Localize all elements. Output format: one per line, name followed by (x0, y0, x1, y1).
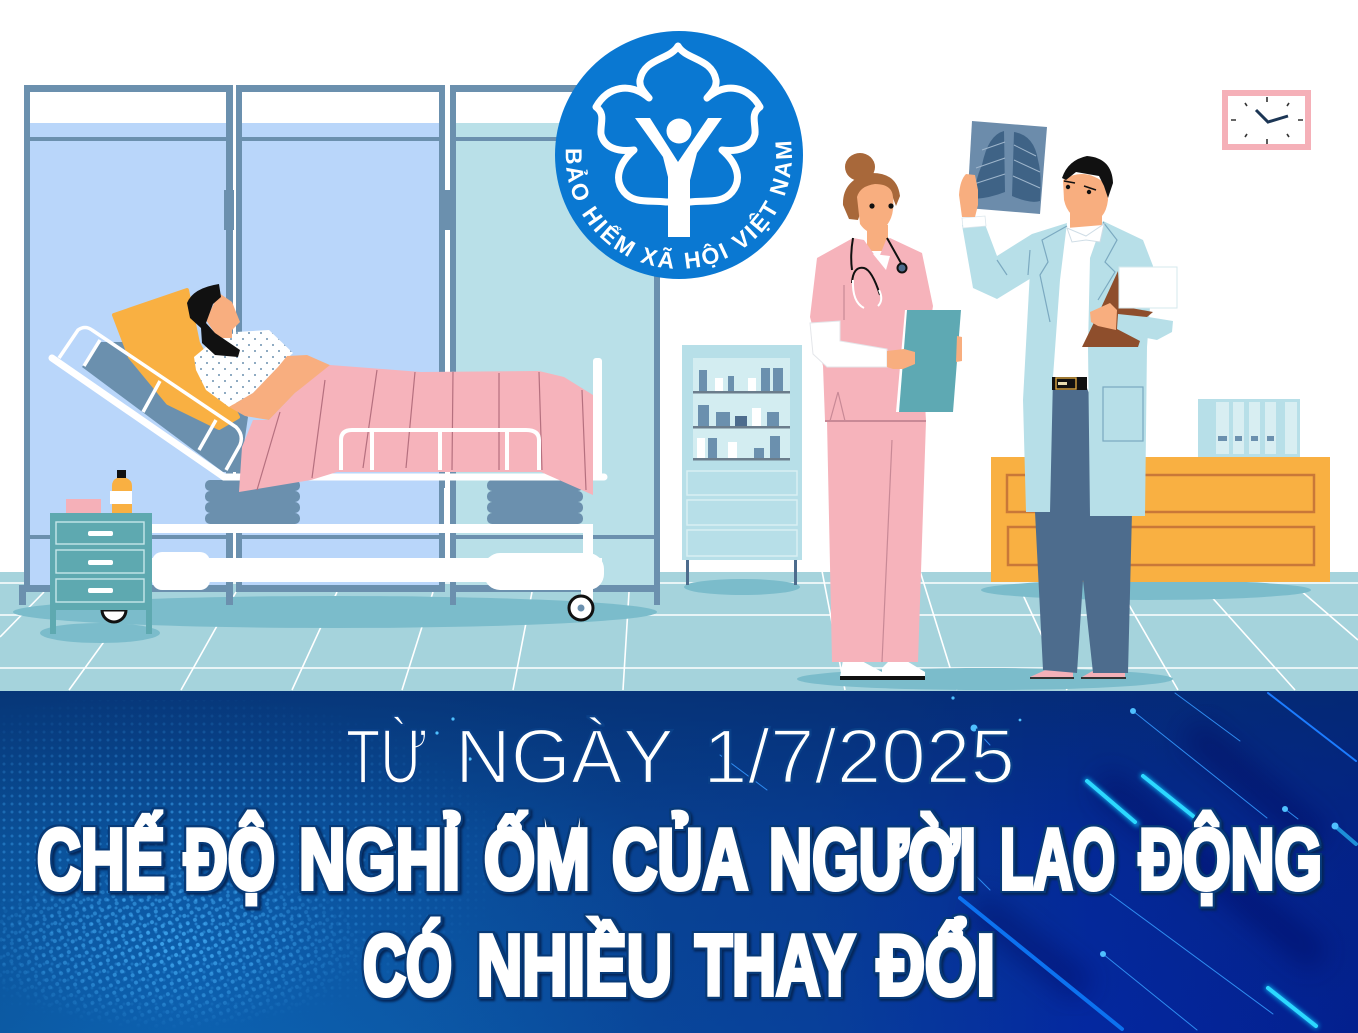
banner date line: 1/7/2025 (703, 714, 1015, 800)
bed frame (52, 358, 604, 477)
banner date line: TỪ (346, 714, 428, 800)
nurse face (857, 184, 893, 234)
doctor shirt (1053, 225, 1103, 377)
nurse hands (887, 349, 915, 369)
floor with tiles (0, 571, 1358, 692)
nurse shoes (840, 660, 925, 680)
banner headline line 1: NGƯỜI (769, 812, 976, 908)
left wheel (102, 610, 126, 622)
x-ray film (967, 121, 1047, 214)
banner headline line 1: CHẾ (37, 812, 165, 908)
bedside cabinet (50, 470, 152, 634)
pink box (66, 499, 101, 513)
doctor hand (1090, 303, 1117, 330)
banner headline line 1: ỐM (484, 812, 590, 908)
dark diagonal bands (975, 730, 1320, 990)
floor shadows (13, 579, 1311, 690)
orange desk (991, 457, 1330, 582)
doctor neck (1070, 210, 1102, 240)
nurse trousers (827, 421, 926, 662)
banner headline line 1: NGHỈ (299, 812, 460, 908)
dense dot wave (0, 868, 352, 1021)
clipboard paper (1119, 267, 1177, 308)
nurse neck (867, 225, 888, 251)
banner headline line 1 (37, 812, 1322, 908)
doctor face (1063, 174, 1108, 221)
wall background (0, 0, 1358, 575)
blanket (239, 365, 593, 495)
doctor (959, 121, 1177, 679)
doctor cuff (962, 216, 986, 228)
nurse top (810, 238, 933, 421)
logo flower (596, 46, 760, 202)
banner background (0, 691, 1358, 1033)
logo (555, 31, 803, 279)
bed base tube (152, 488, 604, 605)
banner headline line 2: ĐỔI (877, 918, 995, 1014)
small sparkles (435, 696, 1338, 957)
blanket folds (257, 370, 586, 490)
logo ring text: BẢO HIỂM XÃ HỘI VIỆT NAM (566, 142, 792, 269)
stethoscope (851, 238, 906, 308)
banner headline line 2 (363, 918, 995, 1014)
medicine shelf (682, 345, 802, 585)
doctor raised hand (959, 174, 978, 217)
logo figure (635, 118, 722, 237)
wheel (569, 596, 593, 620)
clipboard (1082, 271, 1153, 347)
wall clock (1222, 90, 1311, 150)
doctor shoes (1030, 668, 1126, 679)
patient hair (187, 284, 240, 357)
dot pattern (2, 706, 469, 1005)
hospital bed (52, 284, 604, 620)
banner headline line 2: THAY (695, 918, 855, 1014)
banner headline line 2: CÓ (363, 918, 452, 1014)
banner headline line 1: ĐỘ (184, 812, 275, 908)
patient arm (229, 355, 332, 420)
banner headline line 1: CỦA (612, 812, 748, 908)
doctor hair (1062, 156, 1113, 198)
doctor collar (1067, 224, 1104, 242)
banner date line: NGÀY (455, 714, 674, 800)
patient face (206, 293, 240, 338)
nurse hair (843, 153, 900, 220)
binders (1198, 399, 1300, 457)
light streaks (720, 693, 1356, 1030)
bed rail (341, 430, 539, 470)
nurse folder (896, 310, 961, 412)
pillow (114, 290, 238, 428)
patient gown (194, 330, 293, 407)
folding screens (19, 85, 660, 605)
nurse sleeve (810, 321, 887, 367)
doctor coat (962, 219, 1173, 516)
medicine bottle (110, 470, 132, 513)
nurse (810, 153, 962, 680)
doctor trousers (1035, 388, 1132, 673)
head rail (59, 328, 241, 470)
mattress supports (205, 480, 583, 524)
banner headline line 1: LAO (1000, 812, 1115, 908)
grey backrest (82, 342, 248, 472)
banner headline line 2: NHIỀU (477, 918, 672, 1014)
doctor belt (1052, 377, 1087, 390)
banner date line (346, 714, 1015, 800)
